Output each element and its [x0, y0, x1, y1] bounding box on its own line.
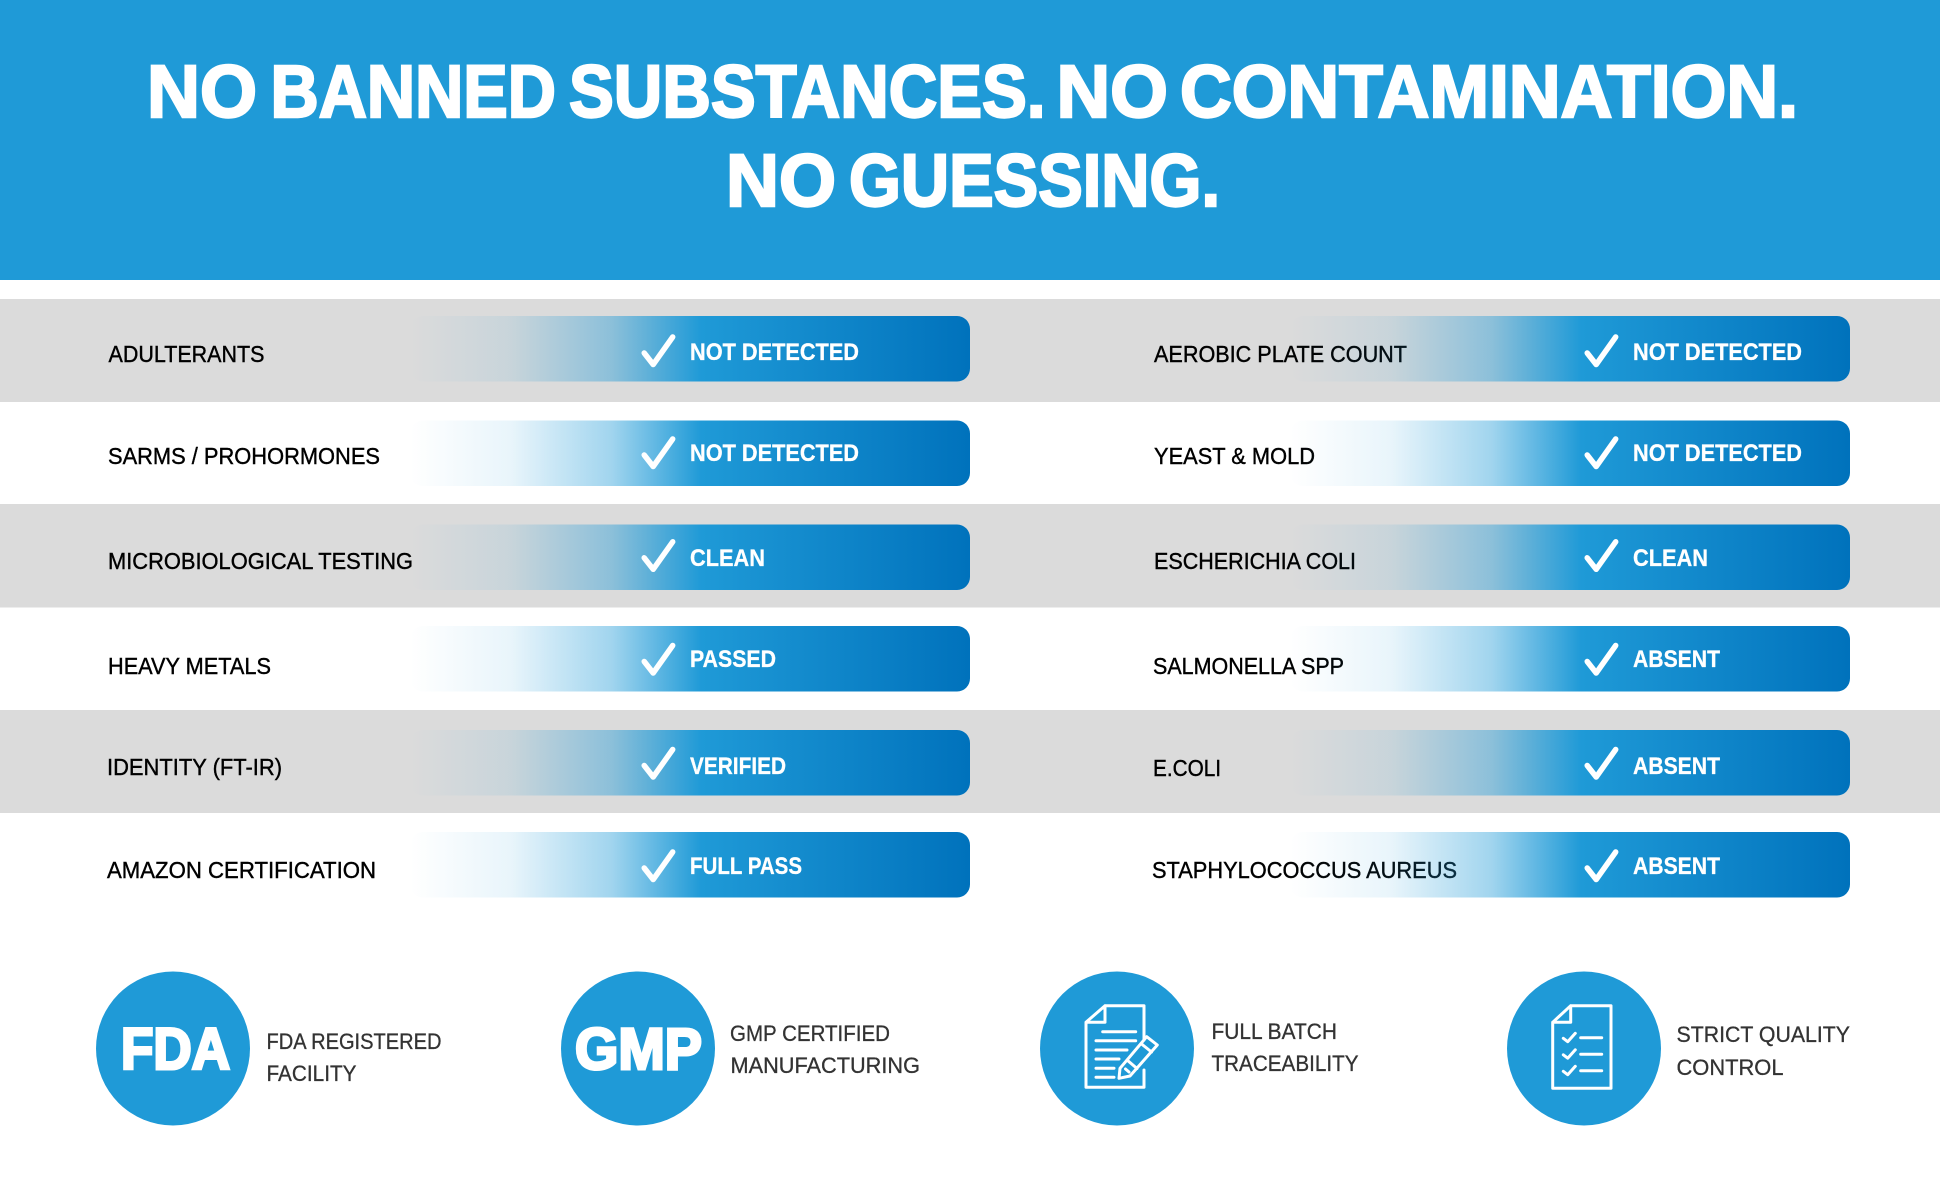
badge: strict quality control: STRICT QUALITY — [1676, 1022, 1850, 1047]
title line 1 — [147, 50, 1798, 133]
title line 1: BANNED — [270, 50, 556, 133]
row: escherichia coli — [1154, 524, 1850, 590]
title line 2: GUESSING. — [849, 139, 1220, 222]
row: escherichia coli: ESCHERICHIA COLI — [1154, 548, 1356, 574]
grey row band 1 — [0, 299, 1940, 402]
badge: full batch traceability: FULL BATCH — [1212, 1019, 1337, 1044]
title line 1: SUBSTANCES. — [569, 50, 1046, 133]
title banner — [0, 0, 1940, 280]
badge: strict quality control — [1507, 972, 1850, 1126]
row: salmonella: ABSENT — [1633, 646, 1720, 673]
row: identity: IDENTITY (FT-IR) — [107, 754, 282, 780]
badge: GMP certified manufacturing: GMP — [575, 1017, 702, 1082]
row: e.coli — [1153, 730, 1850, 796]
row: aerobic plate count: AEROBIC PLATE COUNT — [1154, 341, 1407, 367]
row: adulterants: NOT DETECTED — [690, 339, 859, 366]
row: microbiological testing — [108, 524, 970, 590]
badge: FDA registered facility: FACILITY — [266, 1061, 357, 1086]
row: staphylococcus aureus — [1152, 832, 1850, 898]
row: yeast and mold: YEAST & MOLD — [1154, 443, 1315, 469]
title line 1: NO — [147, 50, 257, 133]
badge: full batch traceability: TRACEABILITY — [1212, 1051, 1359, 1076]
row: salmonella — [1153, 626, 1850, 692]
row: staphylococcus aureus: ABSENT — [1633, 853, 1720, 880]
badge: FDA registered facility: FDA REGISTERED — [266, 1029, 442, 1054]
row: e.coli: E.COLI — [1153, 755, 1221, 781]
row: adulterants: ADULTERANTS — [108, 341, 264, 367]
row: microbiological testing: CLEAN — [690, 545, 765, 572]
row: sarms: SARMS / PROHORMONES — [108, 443, 380, 469]
badge: GMP certified manufacturing: MANUFACTURING — [730, 1053, 920, 1078]
badge: strict quality control: CONTROL — [1676, 1055, 1784, 1080]
row: sarms: NOT DETECTED — [690, 440, 859, 467]
panel: right test results — [1152, 316, 1850, 898]
row: amazon certification: AMAZON CERTIFICATION — [107, 857, 376, 883]
row: identity — [107, 730, 970, 796]
row: adulterants — [108, 316, 970, 382]
badge: GMP certified manufacturing: GMP CERTIFIED — [730, 1021, 890, 1046]
grey row band 5 — [0, 710, 1940, 813]
icon: document with pencil — [1086, 1006, 1157, 1087]
row: heavy metals: PASSED — [690, 646, 776, 673]
row: heavy metals — [108, 626, 970, 692]
row: staphylococcus aureus: STAPHYLOCOCCUS AUREUS — [1152, 857, 1457, 883]
title line 2: NO — [726, 139, 836, 222]
row: yeast and mold — [1154, 420, 1850, 486]
icon: checklist document — [1553, 1006, 1611, 1088]
title line 2 — [726, 139, 1220, 222]
row: e.coli: ABSENT — [1633, 753, 1720, 780]
row: escherichia coli: CLEAN — [1633, 545, 1708, 572]
badge: full batch traceability — [1040, 972, 1359, 1126]
row: aerobic plate count — [1154, 316, 1850, 382]
title line 1: CONTAMINATION. — [1180, 50, 1798, 133]
row: aerobic plate count: NOT DETECTED — [1633, 339, 1802, 366]
title line 1: NO — [1056, 50, 1168, 133]
row: salmonella: SALMONELLA SPP — [1153, 653, 1344, 679]
row: microbiological testing: MICROBIOLOGICAL TESTING — [108, 548, 413, 574]
panel: left test results — [107, 316, 970, 898]
badge: GMP certified manufacturing — [561, 972, 920, 1126]
row: identity: VERIFIED — [690, 753, 786, 780]
row: amazon certification — [107, 832, 970, 898]
row: amazon certification: FULL PASS — [690, 853, 802, 880]
row: yeast and mold: NOT DETECTED — [1633, 440, 1802, 467]
row: sarms — [108, 420, 970, 486]
row: heavy metals: HEAVY METALS — [108, 653, 271, 679]
badge: FDA registered facility — [96, 972, 442, 1126]
badge: FDA registered facility: FDA — [121, 1017, 230, 1082]
grey row band 3 — [0, 504, 1940, 608]
